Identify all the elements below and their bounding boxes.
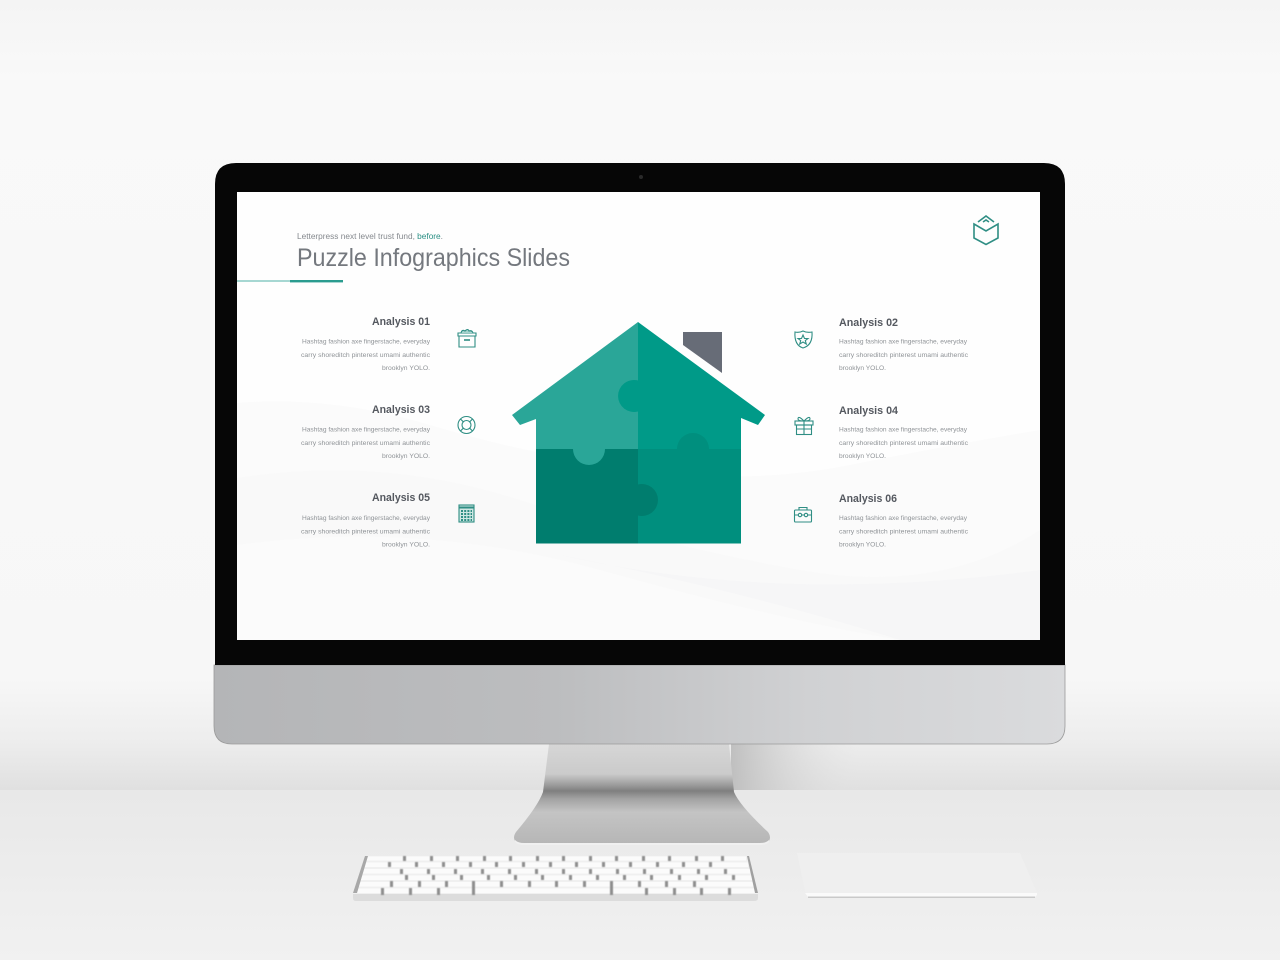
knob: bottom right into top right <box>677 433 709 449</box>
block: analysis 05 <box>301 492 431 548</box>
block: analysis 02: brooklyn YOLO. <box>839 365 886 372</box>
block: analysis 01 <box>301 316 431 372</box>
block: analysis 01: Analysis 01 <box>372 316 430 328</box>
block: analysis 02: Hashtag fashion axe fingerstache, everyday <box>839 338 968 346</box>
block: analysis 06 <box>839 493 969 548</box>
block: analysis 02: carry shoreditch pinterest umami authentic <box>839 352 969 359</box>
logo icon: cube <box>974 216 998 244</box>
block: analysis 03: carry shoreditch pinterest umami authentic <box>301 440 431 447</box>
block: analysis 05: Analysis 05 <box>372 492 430 504</box>
piece: bottom right <box>638 449 741 544</box>
block: analysis 04: carry shoreditch pinterest umami authentic <box>839 440 969 447</box>
icon: chimney <box>683 332 722 373</box>
block: analysis 06: brooklyn YOLO. <box>839 542 886 548</box>
subtitle: Letterpress next level trust fund, before. <box>297 231 443 241</box>
block: analysis 04: brooklyn YOLO. <box>839 453 886 460</box>
block: analysis 03: brooklyn YOLO. <box>382 453 430 460</box>
knob: top right into top left <box>618 380 638 412</box>
block: analysis 06: Analysis 06 <box>839 493 897 505</box>
title underline <box>237 280 343 282</box>
monitor bezel <box>215 163 1065 665</box>
icon: shield star <box>795 331 812 348</box>
block: analysis 05: carry shoreditch pinterest umami authentic <box>301 528 431 536</box>
panel: slide screen <box>237 192 1040 640</box>
piece: top left <box>512 322 638 449</box>
block: analysis 04 <box>839 405 969 460</box>
webcam <box>639 175 643 179</box>
block: analysis 03 <box>301 404 431 460</box>
icon: calculator <box>459 505 474 522</box>
block: analysis 06: Hashtag fashion axe fingerstache, everyday <box>839 515 968 522</box>
icon: gift <box>795 417 813 434</box>
house puzzle graphic <box>512 322 765 544</box>
block: analysis 05: Hashtag fashion axe fingerstache, everyday <box>302 515 431 522</box>
trackpad <box>797 853 1037 898</box>
icon: lifebuoy <box>458 416 475 434</box>
block: analysis 04: Analysis 04 <box>839 405 899 417</box>
title: Puzzle Infographics Slides <box>297 244 570 272</box>
piece: bottom left <box>536 449 638 544</box>
stand shadow on wall <box>731 744 861 790</box>
icon: storage box <box>458 330 476 347</box>
block: analysis 01: carry shoreditch pinterest umami authentic <box>301 352 431 359</box>
block: analysis 01: Hashtag fashion axe fingerstache, everyday <box>302 338 431 346</box>
piece: top right <box>638 322 765 449</box>
knob: top left into bottom left <box>573 449 605 465</box>
keyboard <box>353 856 758 901</box>
knob: bottom left into bottom right <box>638 484 658 516</box>
icon: briefcase <box>794 508 812 522</box>
monitor stand <box>514 744 770 845</box>
background: desk <box>0 790 1280 960</box>
monitor chin <box>214 665 1065 744</box>
block: analysis 04: Hashtag fashion axe fingerstache, everyday <box>839 426 968 434</box>
block: analysis 02: Analysis 02 <box>839 317 898 329</box>
block: analysis 06: carry shoreditch pinterest umami authentic <box>839 528 969 536</box>
block: analysis 05: brooklyn YOLO. <box>382 542 430 548</box>
block: analysis 03: Analysis 03 <box>372 404 430 416</box>
block: analysis 01: brooklyn YOLO. <box>382 365 430 372</box>
block: analysis 02 <box>839 317 969 372</box>
block: analysis 03: Hashtag fashion axe fingerstache, everyday <box>302 426 431 434</box>
